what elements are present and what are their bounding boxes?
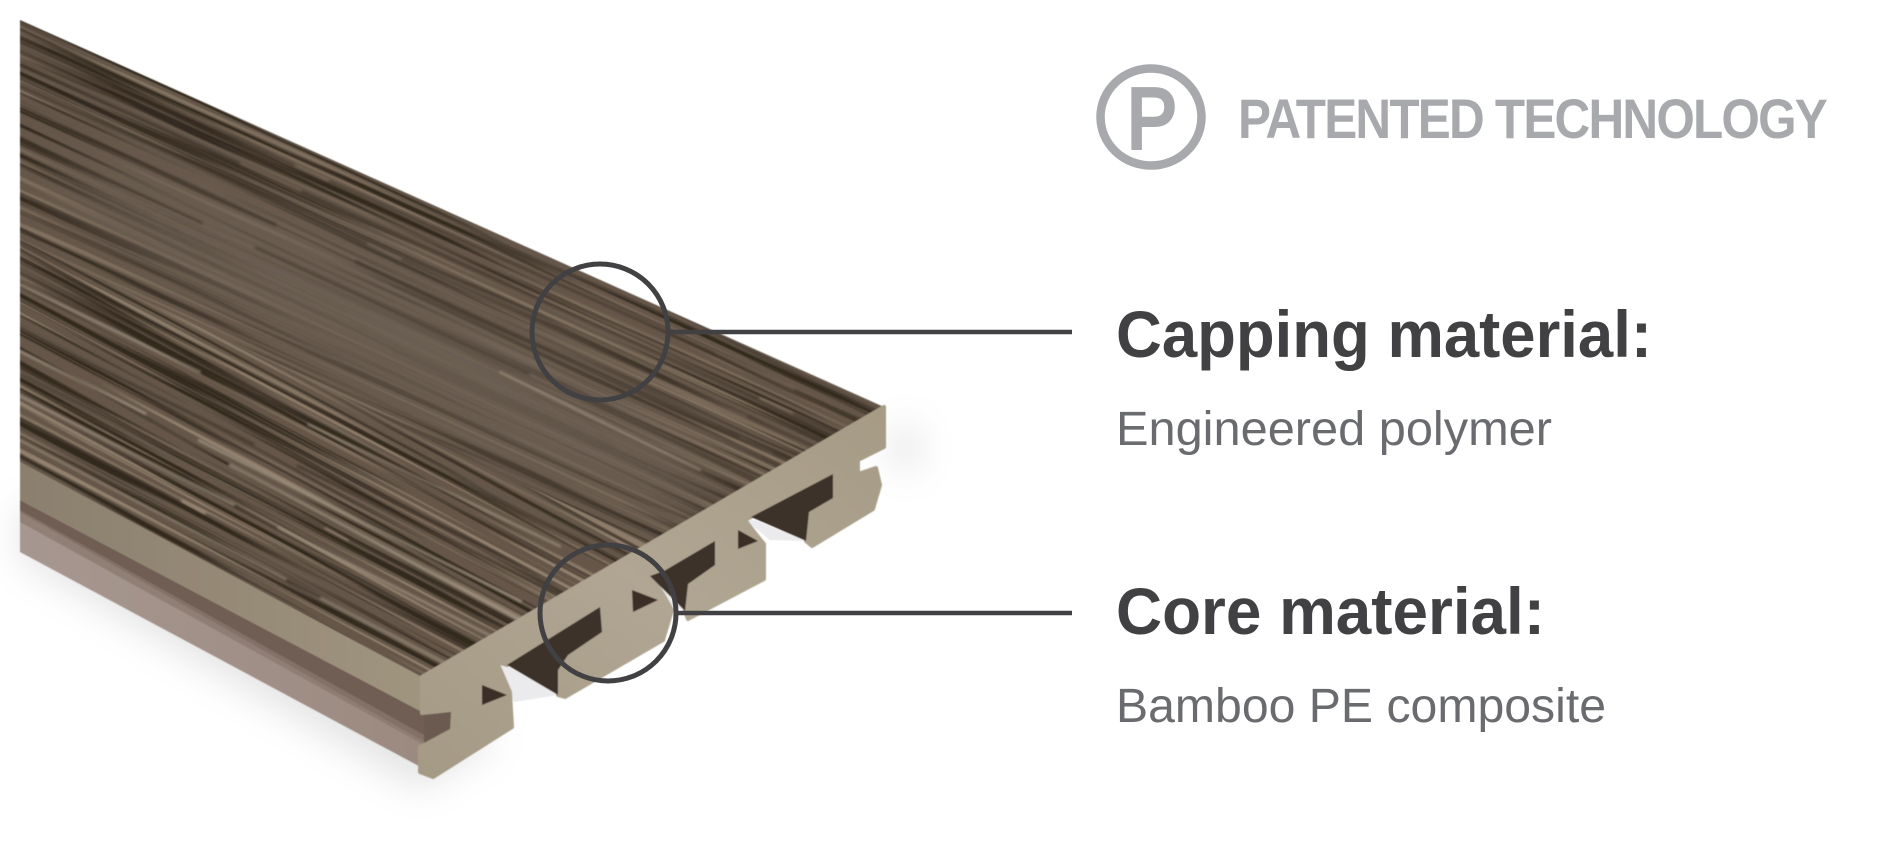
text block: core material	[1116, 574, 1606, 733]
soft ground shadow	[20, 422, 919, 790]
text: engineered polymer: Engineered polymer	[1116, 403, 1552, 456]
callout: capping material marker	[532, 264, 1072, 400]
decking board	[0, 10, 919, 777]
wood-grain capping top face	[19, 20, 882, 676]
board side face	[20, 462, 453, 772]
text block: capping material	[1116, 297, 1652, 456]
heading: core material: Core material:	[1116, 574, 1545, 648]
icon: circled P	[1100, 68, 1202, 167]
callout: core material marker	[540, 545, 1072, 681]
icon: circled P: P	[1127, 72, 1177, 167]
tongue groove shading	[424, 712, 451, 743]
light grain streaks	[20, 285, 700, 663]
heading: capping material: Capping material:	[1116, 297, 1652, 371]
shaded gaps behind hooks	[497, 520, 806, 702]
text: bamboo PE composite: Bamboo PE composite	[1116, 680, 1606, 733]
dark grain streaks	[20, 42, 861, 650]
core end-face profile	[420, 407, 884, 777]
patented technology badge	[1100, 68, 1827, 167]
smooth central band	[32, 132, 740, 535]
hook slot holes	[482, 530, 758, 705]
channel recesses	[507, 474, 833, 695]
